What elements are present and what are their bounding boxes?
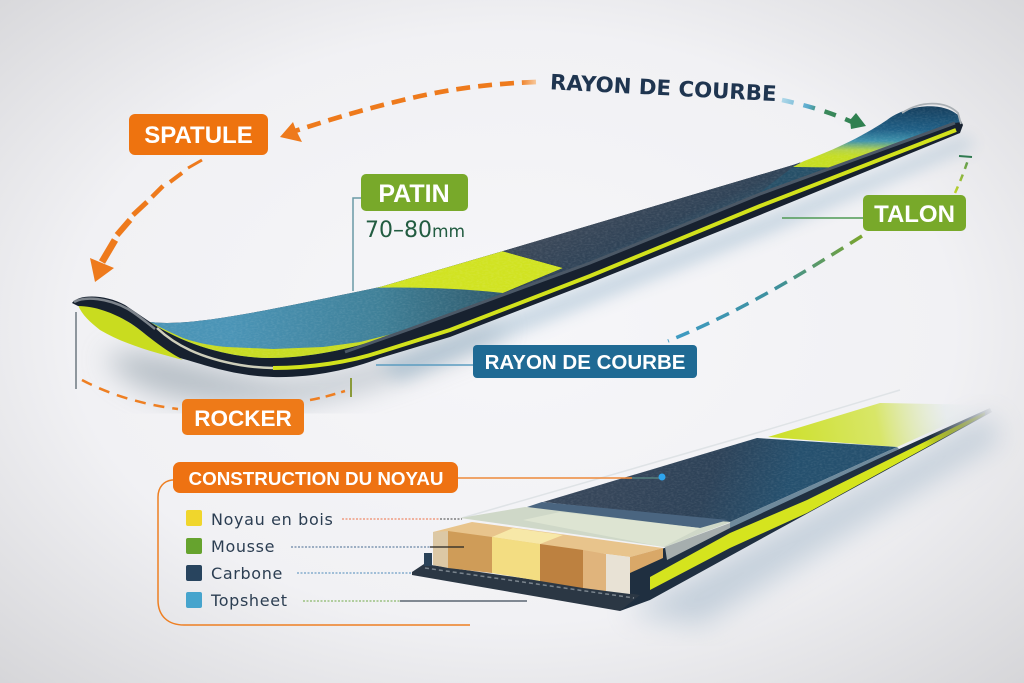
construction heading: [173, 462, 458, 493]
topsheet blue zone: [150, 249, 510, 358]
label: patin: [353, 174, 468, 291]
dark wood block: [540, 544, 583, 588]
cross-section illustration: [412, 390, 1000, 625]
label: spatule: SPATULE: [144, 122, 253, 149]
main ski illustration: [72, 100, 975, 405]
lower orange arc: [90, 160, 202, 282]
legend: mousse: Mousse: [211, 537, 275, 556]
label: rayon de courbe: [376, 345, 697, 378]
block end: [630, 548, 663, 573]
right tip rim: [902, 104, 961, 124]
top lime panel: [768, 403, 990, 447]
construction heading: CONSTRUCTION DU NOYAU: [189, 468, 443, 489]
leader to section: [458, 477, 632, 479]
upper orange arc: [280, 82, 536, 142]
top slate panel: [543, 438, 897, 522]
ski yellow underside at tip: [78, 305, 183, 360]
ski base and edge: [72, 115, 963, 377]
topsheet lime panel: [376, 251, 562, 293]
yellow side stripe: [650, 412, 985, 590]
block tops: [433, 522, 663, 557]
patin width value: 70–80mm: [365, 218, 465, 243]
label: rocker: ROCKER: [194, 406, 292, 431]
talon leader line: [782, 217, 863, 219]
topsheet lime lip: [150, 322, 391, 358]
legend: mousse: [186, 537, 464, 556]
construction panel: [158, 462, 666, 625]
label: rocker: [76, 312, 351, 435]
ski edge highlight: [157, 328, 273, 368]
label: spatule: [129, 114, 268, 155]
fibreglass layer: [460, 502, 731, 560]
ski shadow: [105, 137, 975, 405]
legend: topsheet: [186, 591, 527, 610]
topsheet lower tail panel: [762, 167, 829, 192]
rocker dashed arc: [82, 380, 178, 409]
pale speckled block: [606, 554, 630, 594]
ski tip rim: [74, 299, 155, 329]
clear layer outline: [462, 390, 900, 518]
label: rayon de courbe: RAYON DE COURBE: [485, 351, 685, 374]
label: patin: PATIN: [378, 180, 450, 208]
talon dashed curve to lower label: [668, 236, 862, 341]
legend: noyau en bois: Noyau en bois: [211, 510, 334, 529]
legend: carbone: [186, 564, 412, 583]
wood block: [448, 531, 492, 573]
core blocks: [433, 522, 663, 594]
label: talon: [782, 195, 966, 231]
legend: noyau en bois: [186, 510, 462, 529]
label: talon: TALON: [874, 201, 955, 228]
curve radius heading: RAYON DE COURBE: [549, 70, 777, 107]
panel outline: [158, 480, 470, 625]
topsheet slate panel: [502, 162, 800, 294]
pale block: [433, 531, 448, 568]
cross-section shadow: [625, 415, 1000, 625]
topsheet tip zone: [793, 106, 960, 168]
base plate: [412, 553, 640, 611]
legend: topsheet: Topsheet: [210, 591, 288, 610]
radius arrows: [90, 82, 972, 341]
rayon leader line: [376, 364, 473, 366]
topsheet side edge: [345, 123, 955, 352]
top edge bevel: [730, 447, 899, 528]
ski topsheet: [140, 100, 970, 362]
dark ski body side: [620, 408, 992, 611]
light wood block: [583, 550, 606, 591]
yellow foam block: [492, 537, 540, 581]
patin leader line: [353, 198, 361, 291]
right curve arrow: [782, 100, 866, 129]
legend: carbone: Carbone: [211, 564, 283, 583]
talon dashed tick: [955, 156, 972, 193]
rocker height line: [75, 312, 77, 389]
ski yellow stripe: [273, 130, 956, 368]
